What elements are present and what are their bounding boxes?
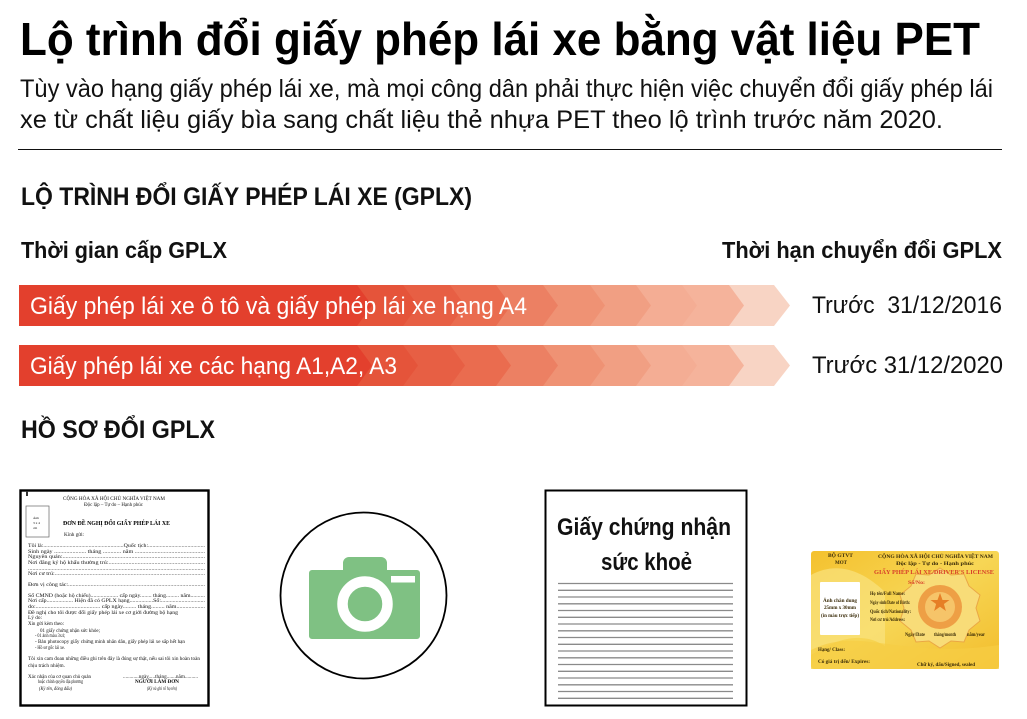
document: PET driving licence card: Ngày/Date — [905, 632, 925, 638]
title: Lộ trình đổi giấy phép lái xe bằng vật liệu PET — [20, 13, 980, 65]
deadline 2020: Trước 31/12/2020 — [812, 352, 1003, 379]
document: PET driving licence card: MOT — [835, 560, 847, 566]
document: application form: ............ngày.....tháng.......năm.......... — [123, 675, 198, 680]
document: application form: Đơn vị công tác:........................................................................................... — [28, 583, 205, 588]
document: PET driving licence card: Có giá trị đến/ Expires: — [818, 658, 870, 665]
document: PET driving licence card: Độc lập - Tự do - Hạnh phúc — [896, 561, 975, 567]
document: PET driving licence card: Nơi cư trú/Address: — [870, 617, 905, 623]
document: PET driving licence card: Hạng/ Class: — [818, 647, 845, 653]
document: PET driving licence card: CỘNG HÒA XÃ HỘI CHỦ NGHĨA VIỆT NAM — [878, 552, 994, 560]
document: health certificate: sức khoẻ — [601, 549, 692, 576]
heading: roadmap: LỘ TRÌNH ĐỔI GIẤY PHÉP LÁI XE (GPLX) — [21, 181, 472, 211]
document: health certificate — [546, 490, 746, 706]
document: health certificate: Giấy chứng nhận — [557, 514, 731, 541]
document: application form — [20, 490, 208, 706]
document: PET driving licence card: (in màu trực tiếp) — [821, 612, 859, 619]
column label: conversion deadline: Thời hạn chuyển đổi GPLX — [722, 237, 1003, 263]
document: application form: (Ký tên, đóng dấu) — [39, 687, 72, 692]
document: application form: 01 giấy chứng nhận sức khỏe; — [40, 629, 100, 634]
document: PET driving licence card: Quốc tịch/Nationality: — [870, 608, 911, 615]
intro paragraph: Tùy vào hạng giấy phép lái xe, mà mọi công dân phải thực hiện việc chuyển đổi giấy phép lái — [20, 75, 993, 103]
document: application form: Nơi cấp.................. Hiện đã có GPLX hạng................Số:.............................. — [28, 599, 205, 604]
document: application form: Độc lập – Tự do – Hạnh phúc — [84, 503, 144, 508]
arrow bar: car licences and A4: Giấy phép lái xe ô tô và giấy phép lái xe hạng A4 — [30, 293, 527, 320]
document: application form: Sinh ngày ..................... tháng ............ năm .............................................. — [28, 550, 205, 555]
document: application form: Ảnh — [33, 515, 39, 520]
document: PET driving licence card: GIẤY PHÉP LÁI XE/DRIVER'S LICENSE — [874, 568, 994, 576]
document: application form: Nơi đăng ký hộ khẩu thường trú:............................................................... — [28, 560, 205, 566]
document: PET driving licence card: năm/year — [967, 632, 985, 638]
intro paragraph — [20, 75, 993, 134]
document: application form: Tôi là:.......................................................Quốc tịch:....................................... — [28, 544, 205, 549]
document: PET driving licence card: Họ tên/Full Name: — [870, 591, 905, 597]
document: application form: hoặc chính quyền địa phương — [38, 680, 83, 685]
document: application form: - Bản photocopy giấy chứng minh nhân dân, giấy phép lái xe sắp hết hạn — [35, 639, 186, 645]
document: application form: Nguyên quán:............................................................................................. — [28, 555, 205, 560]
document: application form: Số CMND (hoặc hộ chiếu)................... cấp ngày........ tháng......... năm.......... — [28, 594, 205, 599]
document: PET driving licence card: Ngày sinh/Date of Birth: — [870, 600, 910, 606]
arrow bar: car licences and A4 — [19, 285, 790, 326]
licence portrait box — [820, 582, 860, 635]
document: application form: chịu trách nhiệm. — [28, 664, 65, 669]
document: PET driving licence card: tháng/month — [934, 632, 956, 638]
document: PET driving licence card: Ảnh chân dung — [823, 596, 857, 604]
document: application form: Đề nghị cho tôi được đổi giấy phép lái xe cơ giới đường bộ hạng — [28, 610, 179, 616]
document: application form: CỘNG HÒA XÃ HỘI CHỦ NGHĨA VIỆT NAM — [63, 496, 166, 502]
document: application form: Lý do: — [28, 616, 42, 621]
deadline 2016: Trước 31/12/2016 — [812, 292, 1002, 319]
document: application form: Xin gửi kèm theo: — [28, 622, 64, 627]
heading: documents: HỒ SƠ ĐỔI GPLX — [21, 414, 215, 444]
document: PET driving licence card: BỘ GTVT — [828, 551, 853, 559]
document: application form: Kính gửi: — [64, 533, 84, 538]
document: application form: - 01 ảnh màu 3x4; — [35, 634, 65, 639]
arrow bar: A1 A2 A3: Giấy phép lái xe các hạng A1,A2, A3 — [30, 353, 397, 380]
licence emblem — [900, 568, 980, 648]
document: application form: (Ký và ghi rõ họ tên) — [147, 687, 177, 692]
document: application form: Xác nhận của cơ quan chủ quản — [28, 675, 91, 680]
document: application form: ĐƠN ĐỀ NGHỊ ĐỔI GIẤY PHÉP LÁI XE — [63, 519, 170, 527]
document: PET driving licence card: Số/No: — [908, 579, 925, 586]
document: PET driving licence card — [811, 551, 999, 669]
photo item: circle with camera — [280, 512, 446, 678]
document: PET driving licence card: 25mm x 30mm — [824, 605, 856, 611]
column label: issue time: Thời gian cấp GPLX — [21, 237, 228, 263]
document: application form: cm — [33, 526, 38, 530]
document: application form: ....................................................................................................................... — [28, 567, 205, 572]
arrow bar: A1 A2 A3 — [19, 345, 790, 386]
document: application form: NGƯỜI LÀM ĐƠN — [135, 679, 179, 685]
document: application form: Nơi cư trú:................................................................................................... — [28, 572, 205, 577]
document: application form: 3 x 4 — [33, 521, 40, 525]
document: application form: Tôi xin cam đoan những điều ghi trên đây là đúng sự thật, nếu sai tôi xin hoàn toàn — [28, 657, 201, 662]
document: application form: - Hồ sơ gốc lái xe. — [35, 646, 65, 651]
document: PET driving licence card: Chữ ký, dấu/Signed, sealed — [917, 661, 975, 668]
document: application form: do:........................................... cấp ngày......... tháng......... năm................... — [28, 605, 205, 610]
icon: camera — [309, 557, 420, 639]
intro paragraph: xe từ chất liệu giấy bìa sang chất liệu thẻ nhựa PET theo lộ trình trước năm 2020. — [20, 106, 943, 134]
